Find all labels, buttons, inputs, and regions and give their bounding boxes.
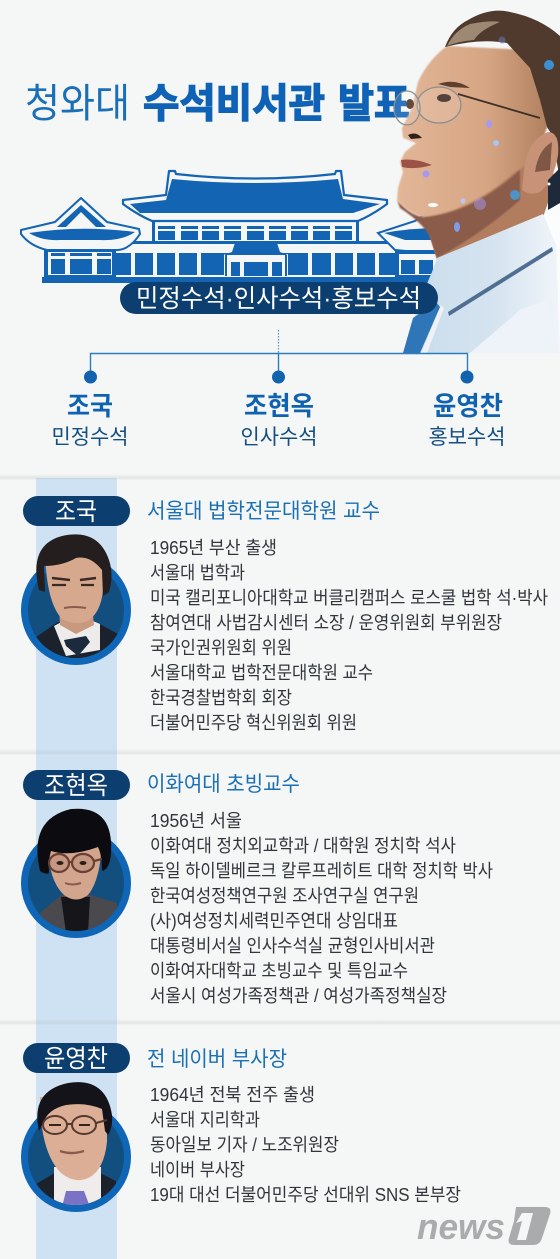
career list — [150, 538, 548, 733]
sparkles — [422, 36, 554, 232]
pill: three senior secretaries: 민정수석·인사수석·홍보수석 — [136, 285, 421, 313]
career list — [150, 811, 493, 1006]
heading: 서울대 법학전문대학원 교수 — [147, 500, 380, 523]
career list: (사)여성정치세력민주연대 상임대표 — [150, 911, 398, 931]
career list — [150, 1085, 461, 1205]
name: Cho Kuk: 조국 — [67, 391, 113, 421]
portrait — [21, 809, 131, 943]
upper walls and windows — [120, 220, 390, 244]
portrait — [21, 534, 131, 670]
ear — [522, 132, 558, 194]
section shadow lines — [0, 474, 560, 1026]
left pavilion — [21, 198, 140, 250]
heading: 전 네이버 부사장 — [147, 1048, 287, 1071]
hair — [445, 11, 560, 180]
name: Yoon Young-chan: 윤영찬 — [433, 391, 503, 421]
career list: 네이버 부사장 — [150, 1160, 245, 1180]
face — [397, 46, 548, 217]
career list: 더불어민주당 혁신위원회 위원 — [150, 713, 357, 733]
logo: news1: news — [417, 1206, 505, 1247]
title: 발표 — [338, 82, 410, 126]
photo: presidential portrait — [394, 11, 560, 353]
logo: news1 — [417, 1206, 550, 1247]
name: Yoon Young-chan — [428, 391, 506, 449]
career list: 이화여자대학교 초빙교수 및 특임교수 — [150, 961, 408, 981]
lower hall — [116, 253, 406, 277]
tie — [403, 302, 440, 353]
org connector — [84, 330, 474, 384]
career list: 서울대 지리학과 — [150, 1110, 260, 1130]
base — [42, 277, 437, 283]
career list: 서울대 법학과 — [150, 563, 245, 583]
career list: 한국경찰법학회 회장 — [150, 688, 292, 708]
title: 수석비서관 — [143, 82, 325, 126]
glasses — [394, 87, 540, 125]
heading: 이화여대 초빙교수 — [147, 773, 300, 796]
name pill: 조국 — [55, 498, 97, 526]
career list: 독일 하이델베르크 칼루프레히트 대학 정치학 박사 — [150, 861, 493, 881]
portico — [224, 254, 288, 277]
career list: 1964년 전북 전주 출생 — [150, 1085, 315, 1105]
main roof fill — [130, 179, 380, 213]
name: Cho Kuk — [52, 391, 128, 449]
shirt — [403, 214, 560, 353]
title — [25, 82, 410, 126]
title: 청와대 — [25, 82, 130, 126]
panel: Cho Hyun-ok — [21, 770, 493, 1006]
career list: 이화여대 정치외교학과 / 대학원 정치학 석사 — [150, 836, 456, 856]
name: Cho Kuk: 민정수석 — [52, 426, 128, 449]
name: Cho Hyun-ok: 조현옥 — [244, 391, 314, 421]
name: Cho Hyun-ok — [240, 391, 318, 449]
white glow behind shoulder — [545, 190, 560, 353]
name: Cho Hyun-ok: 인사수석 — [240, 426, 318, 449]
career list: 한국여성정책연구원 조사연구실 연구원 — [150, 886, 419, 906]
neck — [423, 130, 556, 260]
portrait — [21, 1082, 131, 1217]
eyes, brows, mouth, nose — [438, 82, 470, 88]
blue vertical stripe — [36, 478, 117, 1259]
career list: 1965년 부산 출생 — [150, 538, 277, 558]
panel: Cho Kuk — [21, 496, 548, 733]
career list: 1956년 서울 — [150, 811, 242, 831]
name pill: 윤영찬 — [44, 1045, 108, 1073]
name pill — [23, 770, 130, 800]
panel: Yoon Young-chan — [21, 1043, 461, 1217]
name pill — [23, 1043, 130, 1073]
main roof outline — [123, 171, 387, 221]
career list: 서울대학교 법학전문대학원 교수 — [150, 663, 373, 683]
career list: 동아일보 기자 / 노조위원장 — [150, 1135, 339, 1155]
right pavilion — [378, 205, 450, 255]
career list: 참여연대 사법감시센터 소장 / 운영위원회 부위원장 — [150, 613, 502, 633]
career list: 대통령비서실 인사수석실 균형인사비서관 — [150, 936, 435, 956]
icon: Cheong Wa Dae building — [21, 171, 450, 283]
name pill — [23, 496, 130, 526]
name pill: 조현옥 — [44, 772, 108, 800]
career list: 서울시 여성가족정책관 / 여성가족정책실장 — [150, 986, 447, 1006]
career list: 19대 대선 더불어민주당 선대위 SNS 본부장 — [150, 1185, 461, 1205]
career list: 국가인권위원회 위원 — [150, 638, 292, 658]
name: Yoon Young-chan: 홍보수석 — [428, 426, 506, 449]
